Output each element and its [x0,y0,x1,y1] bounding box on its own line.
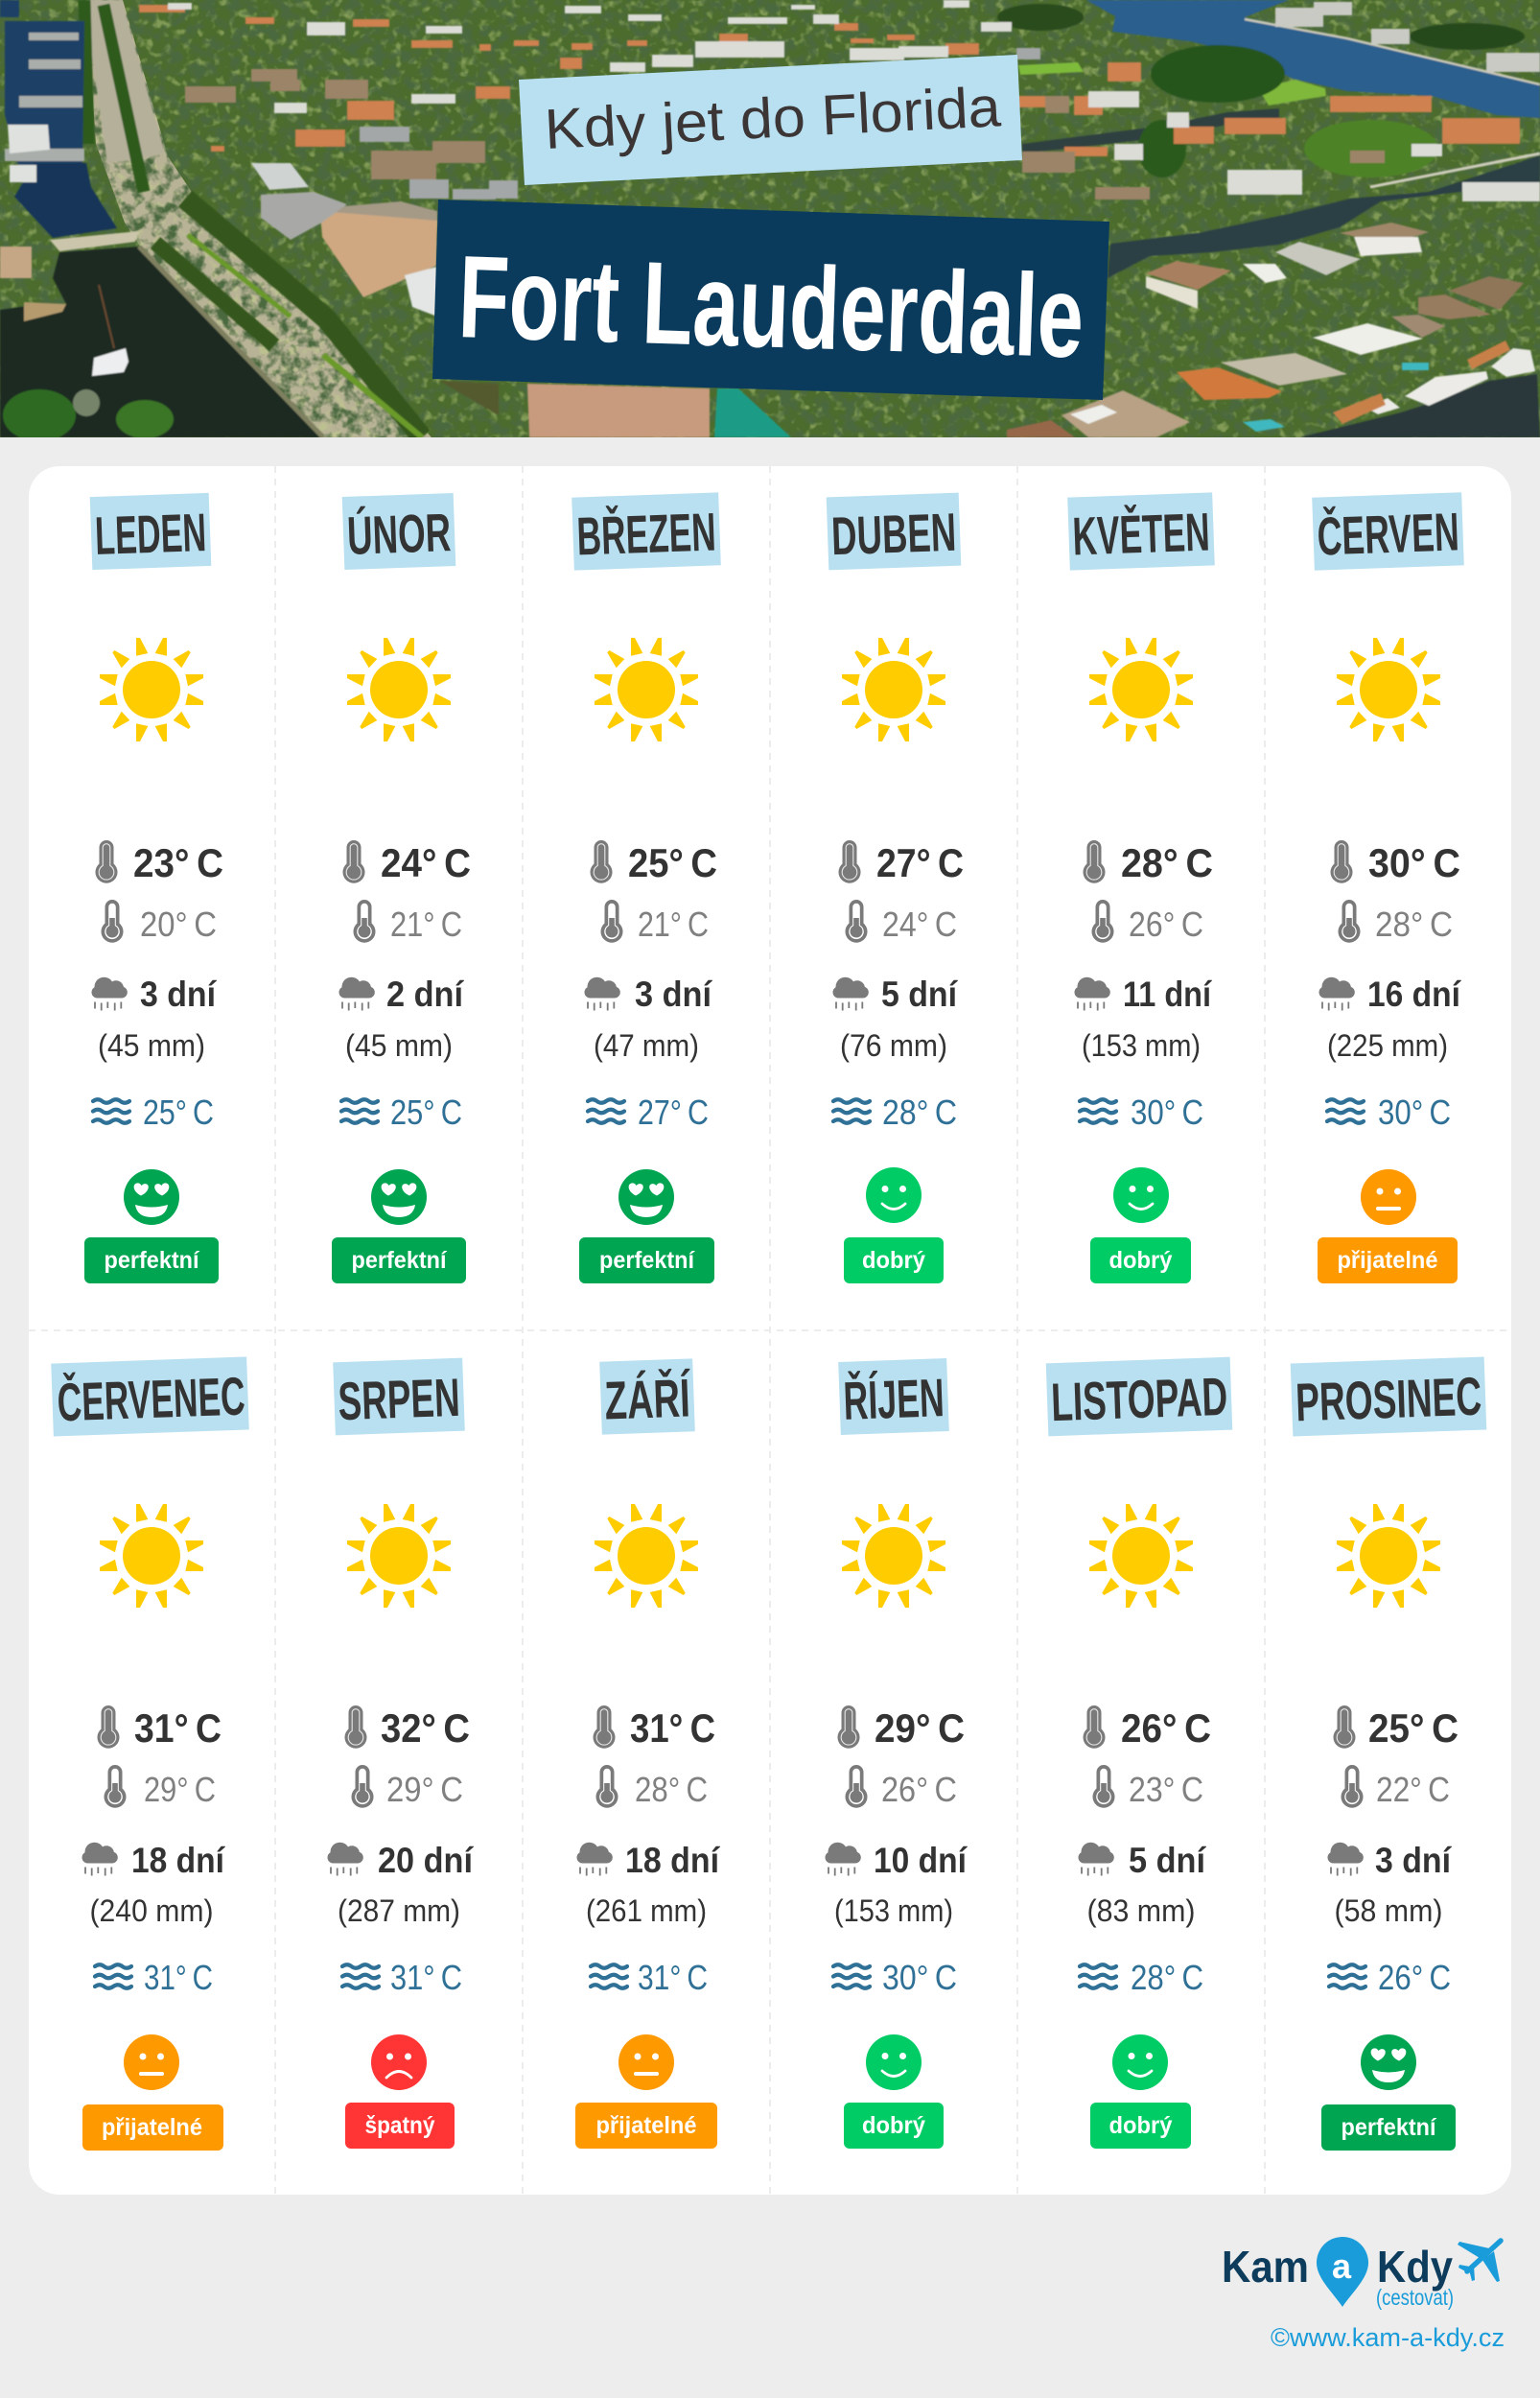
sea temperature [588,1093,709,1132]
rainy days [1074,975,1212,1014]
heading: DUBEN [827,493,961,570]
month: červenec [51,1356,249,2151]
max temperature [1084,840,1213,885]
month: červen [1312,492,1464,1283]
icon: map pin [1317,2237,1368,2307]
rainy days [585,975,713,1014]
min temperature [351,1765,463,1809]
sea temperature: 25° C [143,1093,214,1132]
min temperature [596,1765,708,1809]
rating: perfektní [1321,2034,1456,2151]
heading: ZÁŘÍ: ZÁŘÍ [604,1367,692,1431]
rainy days: 3 dní [140,975,218,1014]
month: únor [332,493,471,1283]
logo: Kam a Kdy (cestovat): Kdy [1377,2242,1453,2292]
max temperature [591,840,717,885]
max temperature [343,840,471,885]
sea temperature [833,1093,957,1132]
icon: sun [347,1504,451,1608]
max temperature [838,1705,965,1751]
sea temperature: 31° C [390,1958,462,1997]
rainfall: (47 mm) [594,1028,699,1063]
month: duben [827,493,964,1283]
heading: SRPEN: SRPEN [338,1367,461,1431]
sea temperature [1080,1958,1203,1997]
month: listopad [1046,1357,1232,2149]
min temperature: 24° C [882,905,957,944]
rating: přijatelné: přijatelné [102,2114,202,2141]
icon: sun [842,638,945,741]
min temperature: 28° C [1375,905,1453,944]
sea temperature [591,1958,708,1997]
icon: sun [1337,638,1440,741]
icon: sun [100,638,203,741]
heading: BŘEZEN: BŘEZEN [576,501,717,567]
sea temperature: 31° C [638,1958,708,1997]
rainfall: (45 mm) [98,1028,205,1063]
rating: přijatelné [1318,1169,1458,1283]
heading: ČERVENEC [51,1356,249,1437]
rating: dobrý [1090,1167,1191,1283]
rating: přijatelné [82,2034,223,2151]
max temperature: 30° C [1368,840,1460,885]
sea temperature: 30° C [1378,1093,1451,1132]
heading: PROSINEC [1291,1356,1486,1437]
min temperature: 21° C [638,905,709,944]
icon: sun [1089,638,1193,741]
rainy days [92,975,218,1014]
subtitle ribbon: Kdy jet do Florida [519,55,1022,185]
rating: dobrý [844,2034,944,2149]
heading: ŘÍJEN: ŘÍJEN [843,1367,945,1431]
min temperature [846,900,957,944]
sea temperature [833,1958,957,1997]
heading: BŘEZEN [572,492,721,571]
sea temperature: 27° C [638,1093,709,1132]
max temperature [1333,1705,1458,1751]
max temperature: 31° C [630,1705,715,1751]
sea temperature [1080,1093,1203,1132]
heading: ČERVEN [1312,492,1464,571]
heading: KVĚTEN [1067,492,1215,571]
rating: perfektní [579,1169,714,1283]
sea temperature: 28° C [1131,1958,1203,1997]
max temperature: 28° C [1121,840,1213,885]
panel: monthly climate table [29,466,1511,2195]
rating: perfektní: perfektní [104,1247,199,1274]
rainy days [339,975,465,1014]
rainfall: (153 mm) [1082,1028,1201,1063]
min temperature: 29° C [144,1770,216,1809]
heading: ZÁŘÍ [599,1358,695,1435]
min temperature: 29° C [386,1770,463,1809]
min temperature [102,900,217,944]
rainy days [82,1841,226,1880]
sea temperature [1329,1958,1451,1997]
rating: perfektní: perfektní [351,1247,447,1274]
rating: dobrý: dobrý [1108,1247,1173,1274]
rating: přijatelné: přijatelné [1337,1247,1438,1274]
sea temperature [342,1958,462,1997]
min temperature [104,1765,216,1809]
max temperature: 31° C [134,1705,222,1751]
month: prosinec [1291,1356,1486,2151]
sea temperature [341,1093,462,1132]
subtitle ribbon: Kdy jet do Florida: Kdy jet do Florida [543,75,1002,161]
rainfall: (58 mm) [1335,1893,1442,1928]
max temperature [838,840,964,885]
sea temperature: 31° C [144,1958,213,1997]
rainfall: (225 mm) [1327,1028,1448,1063]
max temperature [1084,1705,1211,1751]
rainy days [1319,975,1462,1014]
rating: dobrý [1090,2034,1191,2149]
icon: airplane [1458,2241,1501,2282]
heading: LEDEN: LEDEN [94,502,207,566]
rainfall: (76 mm) [840,1028,947,1063]
icon: sun [1337,1504,1440,1608]
rating: dobrý [844,1167,944,1283]
month: březen [572,492,721,1283]
heading: LEDEN [90,493,211,570]
month: září [575,1358,721,2149]
month: srpen [328,1358,475,2149]
min temperature: 22° C [1376,1770,1450,1809]
rating: špatný [345,2034,455,2149]
sea temperature [93,1093,214,1132]
heading: SRPEN [333,1358,465,1435]
rating: perfektní: perfektní [599,1247,695,1274]
max temperature: 29° C [875,1705,965,1751]
month: říjen [825,1358,968,2149]
sea temperature [95,1958,213,1997]
rainy days: 20 dní [378,1841,475,1880]
min temperature: 21° C [390,905,462,944]
heading: ŘÍJEN [838,1358,949,1435]
rating: špatný: špatný [364,2112,435,2139]
rating: dobrý: dobrý [862,2112,925,2139]
min temperature: 26° C [881,1770,957,1809]
min temperature [1091,900,1203,944]
rainy days: 11 dní [1123,975,1212,1014]
min temperature [1341,1765,1450,1809]
sea temperature [1327,1093,1451,1132]
heading: LISTOPAD [1046,1357,1232,1436]
heading: KVĚTEN: KVĚTEN [1072,502,1211,566]
rating: dobrý: dobrý [862,1247,925,1274]
rainy days: 3 dní [1375,1841,1453,1880]
month: květen [1067,492,1215,1283]
logo: Kam a Kdy (cestovat): Kam [1222,2242,1309,2292]
rating: přijatelné [575,2034,717,2149]
rainy days: 16 dní [1367,975,1462,1014]
rainfall: (83 mm) [1087,1893,1195,1928]
max temperature [96,840,223,885]
title ribbon: Fort Lauderdale [432,200,1109,400]
rainy days [328,1841,475,1880]
rating: perfektní [332,1169,466,1283]
icon: map pin: a [1332,2246,1352,2286]
rainy days: 2 dní [386,975,465,1014]
icon: sun [595,638,698,741]
rainy days [825,1841,968,1880]
max temperature: 32° C [381,1705,470,1751]
max temperature: 27° C [876,840,964,885]
max temperature [1331,840,1460,885]
rainfall: (261 mm) [586,1893,707,1928]
max temperature: 24° C [381,840,471,885]
min temperature [1093,1765,1203,1809]
rainy days: 3 dní [635,975,713,1014]
heading: DUBEN: DUBEN [830,502,957,566]
heading: ÚNOR [342,493,455,570]
sea temperature: 30° C [1131,1093,1203,1132]
heading: ČERVENEC: ČERVENEC [57,1366,246,1432]
max temperature: 26° C [1121,1705,1211,1751]
rainfall: (287 mm) [338,1893,460,1928]
min temperature [353,900,462,944]
rainy days: 5 dní [881,975,959,1014]
min temperature [600,900,709,944]
icon: sun [100,1504,203,1608]
icon: sun [842,1504,945,1608]
website credit: ©www.kam-a-kdy.cz [1271,2323,1505,2352]
sea temperature: 30° C [882,1958,957,1997]
rainy days [832,975,959,1014]
icon: sun [595,1504,698,1608]
month: leden [84,493,223,1283]
sea temperature: 25° C [390,1093,462,1132]
rainy days [577,1841,721,1880]
rainfall: (240 mm) [90,1893,213,1928]
logo: Kam a Kdy (cestovat): (cestovat) [1376,2285,1454,2310]
min temperature: 26° C [1129,905,1203,944]
rainy days [1327,1841,1453,1880]
header photo: aerial view of Fort Lauderdale canals [0,0,1540,441]
rating: perfektní [84,1169,219,1283]
heading: ČERVEN: ČERVEN [1317,501,1460,567]
min temperature [1339,900,1453,944]
rating: dobrý: dobrý [1108,2112,1173,2139]
rating: perfektní: perfektní [1341,2114,1436,2141]
max temperature [98,1705,222,1751]
max temperature: 23° C [133,840,223,885]
max temperature [345,1705,470,1751]
rainy days: 5 dní [1129,1841,1207,1880]
min temperature: 23° C [1129,1770,1203,1809]
sea temperature: 26° C [1378,1958,1451,1997]
rainy days: 10 dní [874,1841,968,1880]
rainy days: 18 dní [131,1841,226,1880]
min temperature [846,1765,957,1809]
heading: ÚNOR: ÚNOR [346,502,452,566]
min temperature: 20° C [140,905,217,944]
sea temperature: 28° C [882,1093,957,1132]
logo: Kam a Kdy (cestovat) [1222,2237,1501,2310]
rainfall: (45 mm) [345,1028,453,1063]
icon: sun [347,638,451,741]
heading: LISTOPAD: LISTOPAD [1050,1366,1228,1432]
rainy days [1078,1841,1207,1880]
title ribbon: Fort Lauderdale: Fort Lauderdale [456,231,1085,382]
min temperature: 28° C [635,1770,708,1809]
rating: přijatelné: přijatelné [596,2112,697,2139]
rainy days: 18 dní [625,1841,721,1880]
max temperature [593,1705,715,1751]
icon: sun [1089,1504,1193,1608]
rainfall: (153 mm) [834,1893,953,1928]
max temperature: 25° C [628,840,717,885]
max temperature: 25° C [1368,1705,1458,1751]
